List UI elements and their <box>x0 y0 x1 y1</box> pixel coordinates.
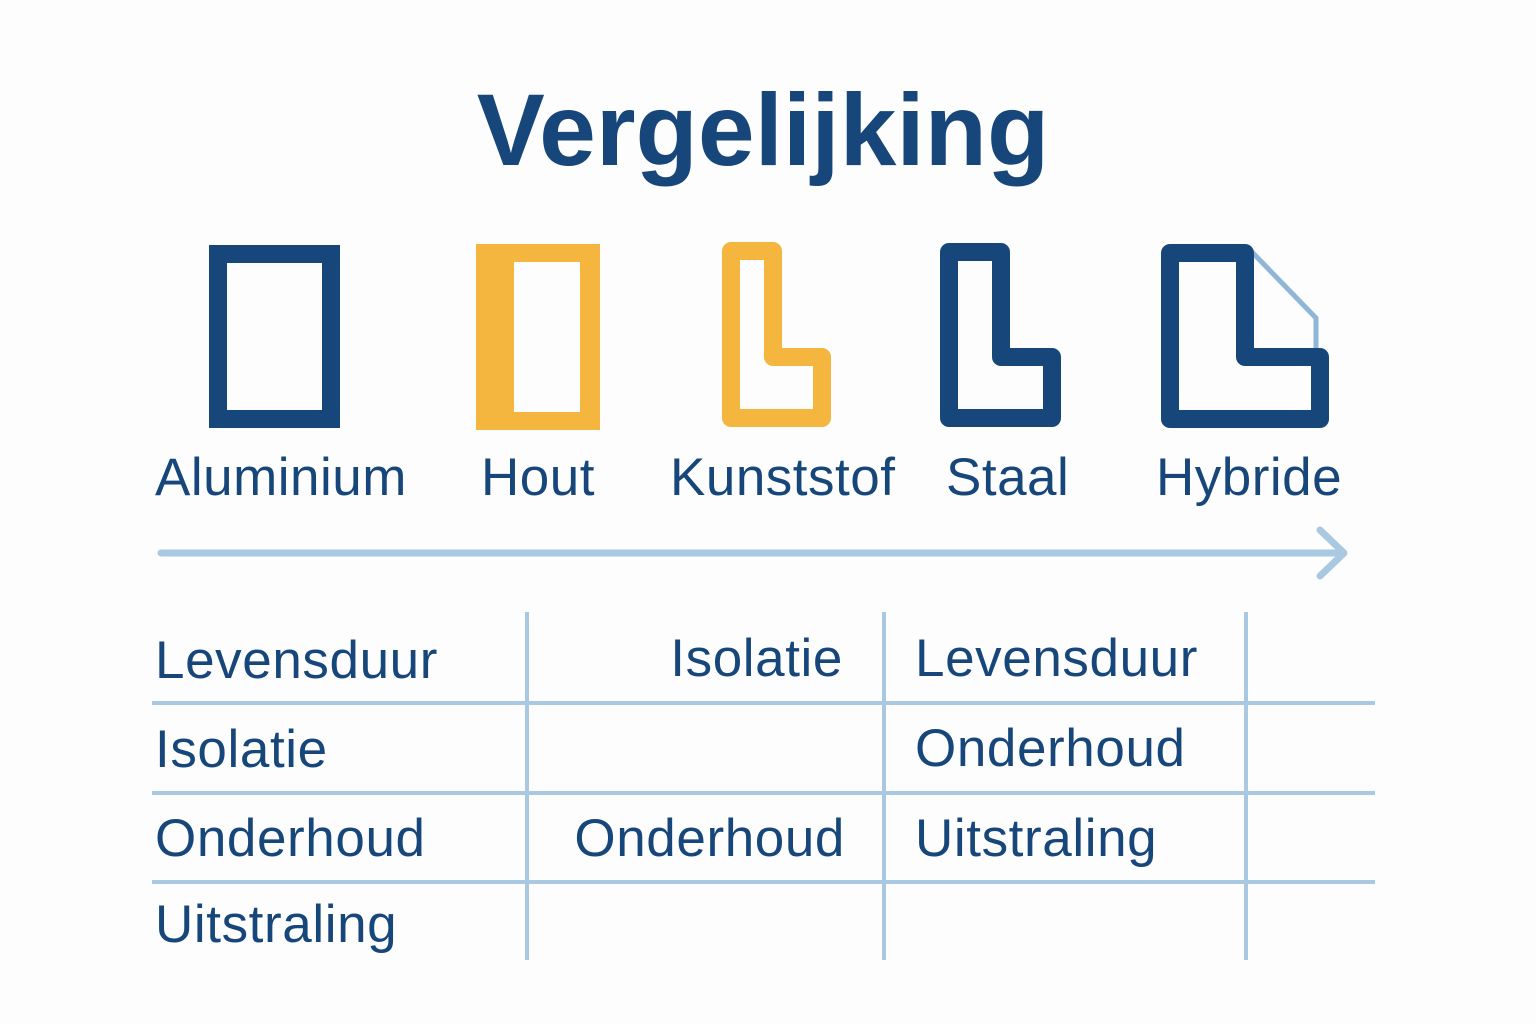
title: Vergelijking <box>477 73 1049 187</box>
table text: Onderhoud <box>574 809 845 868</box>
labels: Kunststof <box>670 448 895 507</box>
icon: aluminium frame <box>218 254 331 419</box>
icon: hout frame <box>476 244 600 430</box>
icon: kunststof profile <box>731 251 822 418</box>
table text: Levensduur <box>915 629 1198 688</box>
labels <box>155 448 1342 507</box>
table grid <box>152 612 1375 960</box>
labels: Hybride <box>1156 448 1342 507</box>
table text: Onderhoud <box>155 809 426 868</box>
icon: staal profile <box>949 252 1052 418</box>
table text: Uitstraling <box>915 809 1157 868</box>
labels: Hout <box>481 448 595 507</box>
table text: Isolatie <box>670 629 843 688</box>
table text: Uitstraling <box>155 895 397 954</box>
labels: Staal <box>946 448 1069 507</box>
table text: Onderhoud <box>915 719 1186 778</box>
table text <box>155 629 1198 954</box>
table text: Isolatie <box>155 720 328 779</box>
icon: hybride profile <box>1170 250 1320 419</box>
table text: Levensduur <box>155 631 438 690</box>
arrow <box>161 530 1344 576</box>
labels: Aluminium <box>155 448 407 507</box>
